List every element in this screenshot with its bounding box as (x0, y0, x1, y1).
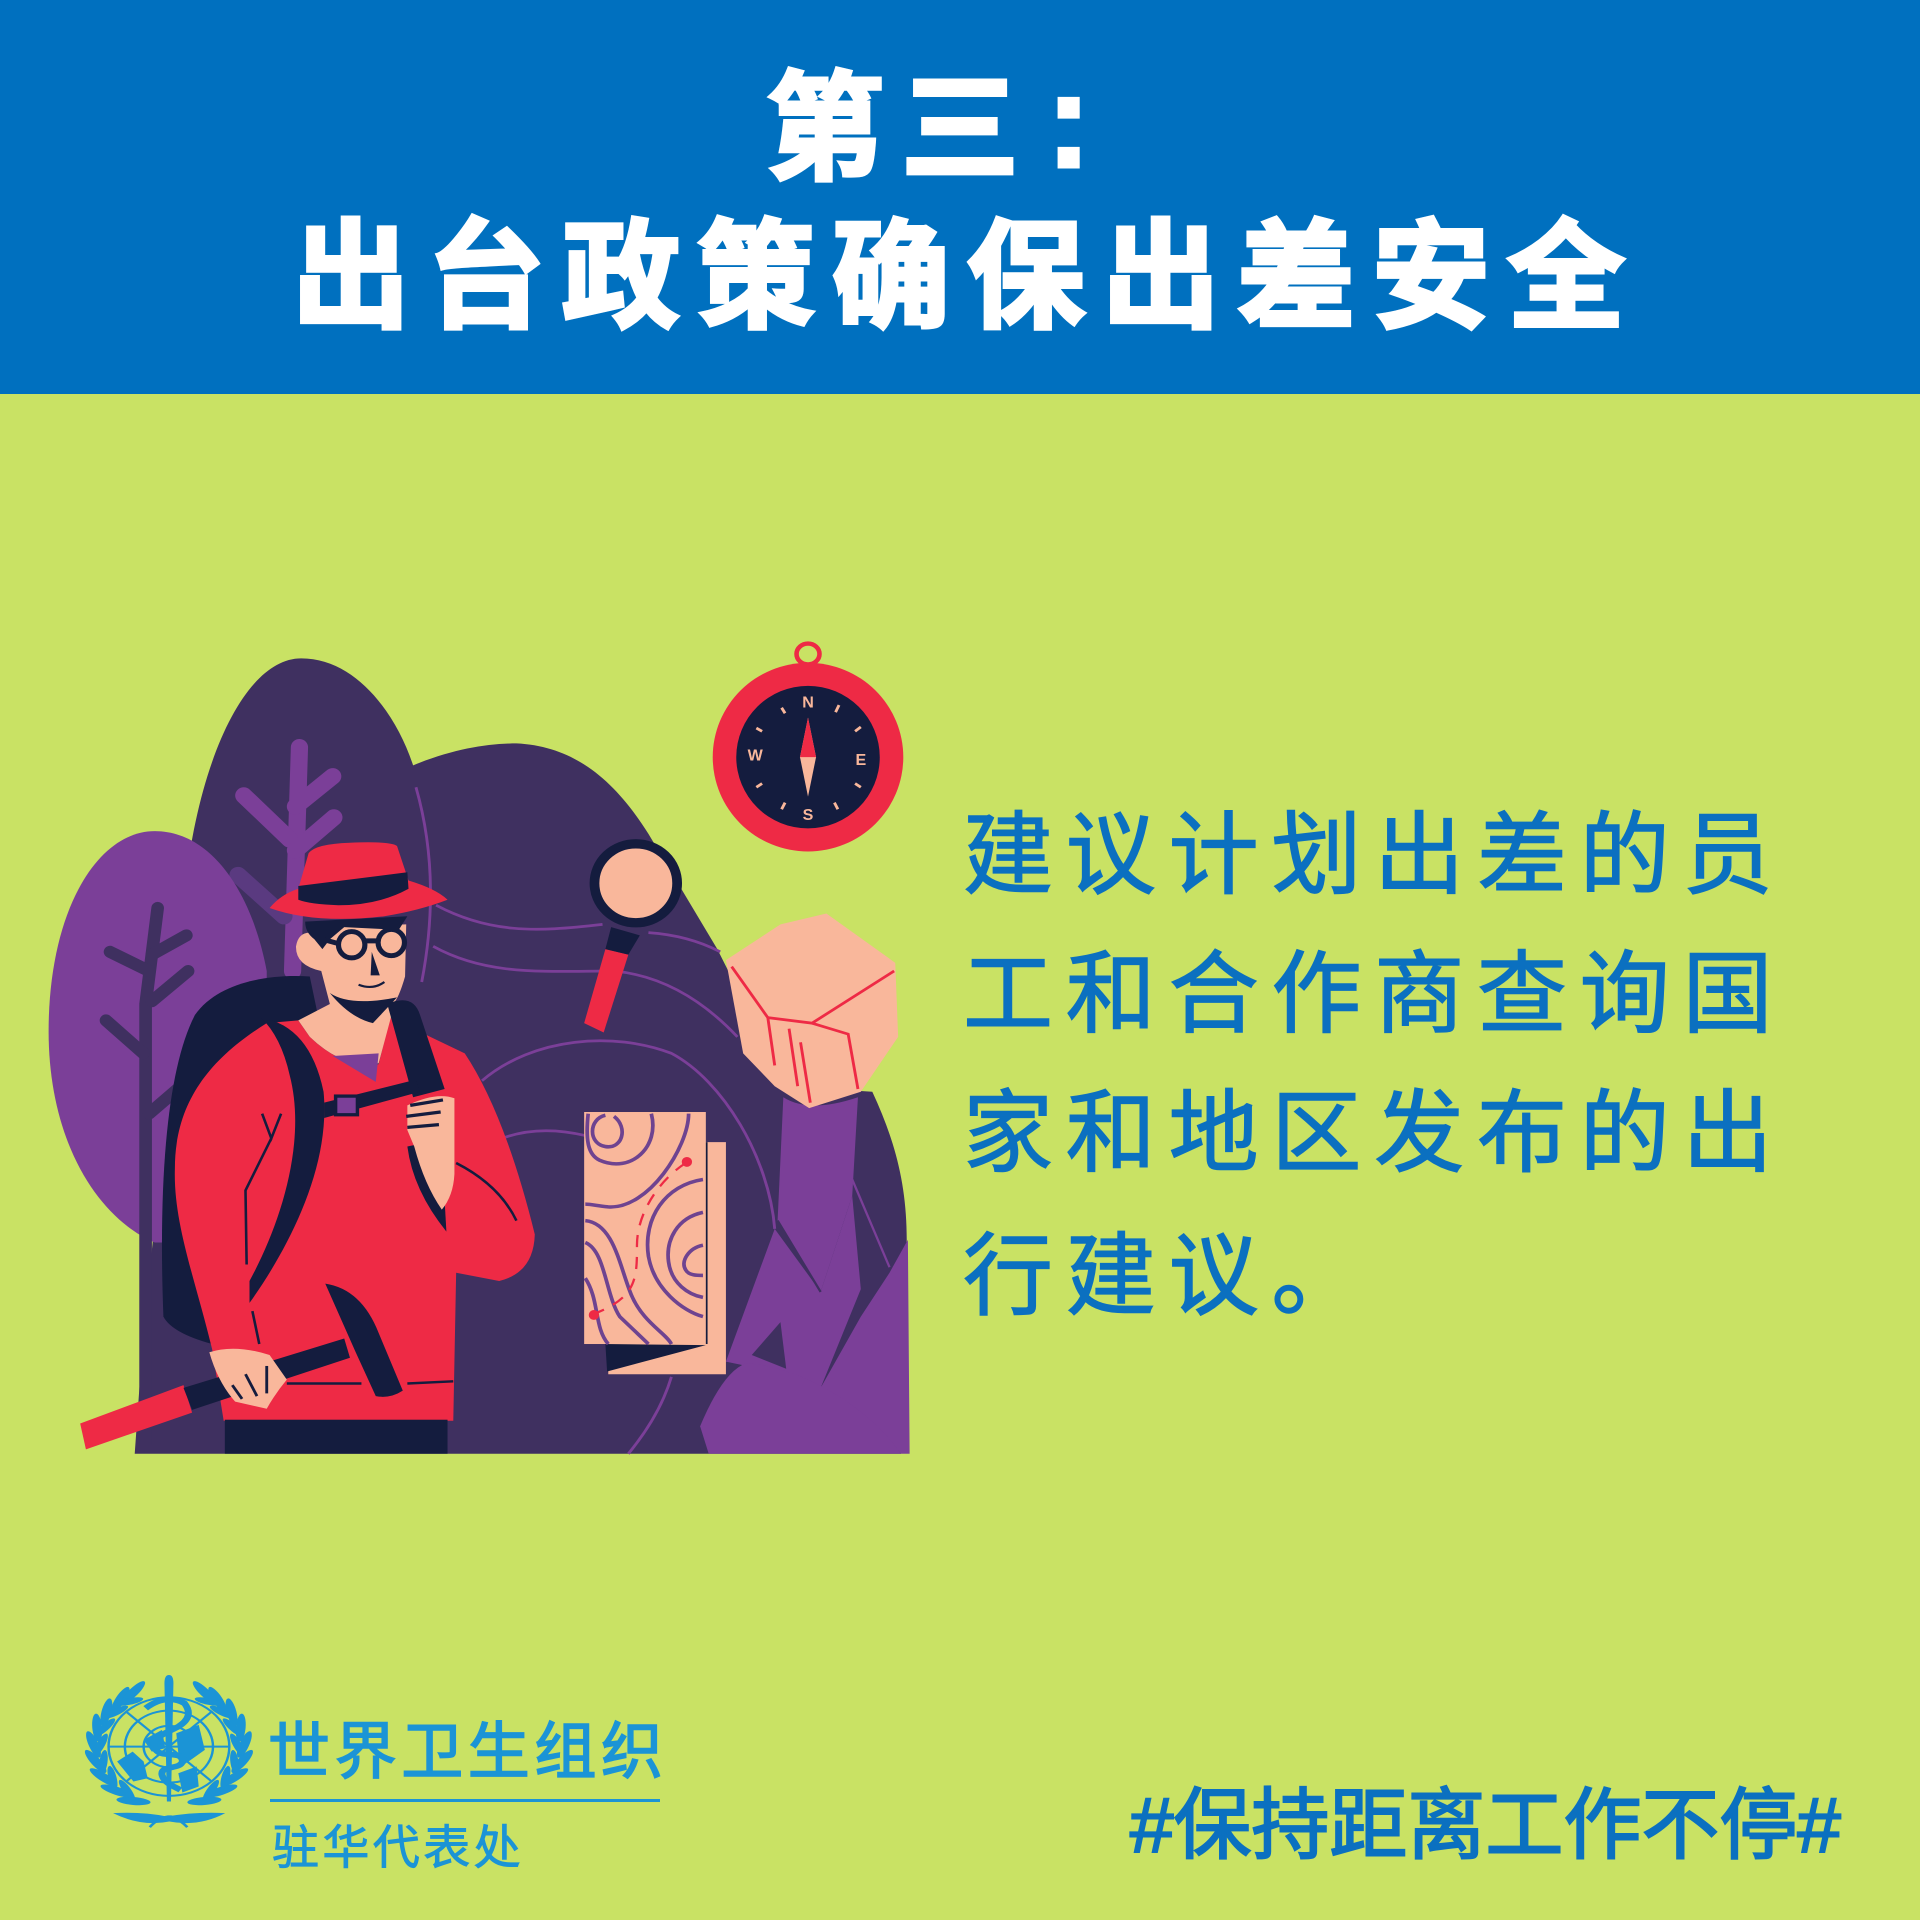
hiker (80, 842, 535, 1454)
compass: W (748, 748, 763, 764)
chest strap (324, 1080, 420, 1118)
wreath right (187, 1679, 256, 1806)
compass: N (802, 695, 814, 712)
body line 1: 建议计划出差的员 (963, 782, 1785, 912)
body line 4: 行建议。 (963, 1203, 1374, 1333)
body (175, 1018, 535, 1421)
hashtag: #保持距离工作不停# (1130, 1781, 1841, 1869)
rocks and raised arm (700, 1097, 910, 1454)
hat (270, 842, 448, 919)
office name: 驻华代表处 (272, 1821, 524, 1874)
continents (117, 1752, 148, 1782)
backpack (162, 976, 327, 1344)
title line 2: 出台政策确保出差安全 (292, 212, 1642, 344)
compass (713, 644, 903, 851)
lower strap (407, 1141, 446, 1232)
hand on hammer (209, 1349, 287, 1409)
right strap (387, 1000, 445, 1097)
left tree (49, 831, 267, 1243)
map (584, 1112, 726, 1374)
staff (164, 1675, 173, 1802)
body line 2: 工和合作商查询国 (963, 921, 1785, 1051)
back hills (135, 658, 907, 1454)
left tree trunk (106, 908, 188, 1445)
sleeve lines (245, 1114, 516, 1384)
compass: E (855, 752, 866, 769)
neck and face (296, 924, 406, 1064)
globe (109, 1697, 229, 1796)
back tree (238, 747, 334, 971)
title line 1: 第三 (766, 64, 1036, 196)
title colon: : (1046, 44, 1091, 196)
organisation name: 世界卫生组织 (268, 1718, 668, 1787)
divider rule (270, 1799, 660, 1802)
compass: S (803, 808, 813, 824)
pants (225, 1420, 448, 1454)
body text (963, 782, 1785, 1333)
raised hand (726, 913, 898, 1108)
header band (0, 0, 1920, 394)
wreath left (82, 1679, 151, 1806)
contour lines (416, 787, 775, 1454)
left strap (250, 1018, 324, 1303)
hand on strap (407, 1096, 454, 1210)
glasses (322, 929, 404, 958)
WHO logo text block (268, 1718, 668, 1874)
hammer (80, 1385, 192, 1449)
nose and mouth (371, 952, 380, 975)
body line 3: 家和地区发布的出 (963, 1060, 1785, 1190)
magnifying glass (584, 844, 677, 1032)
wreath ribbon (113, 1813, 225, 1823)
snake (146, 1699, 188, 1790)
